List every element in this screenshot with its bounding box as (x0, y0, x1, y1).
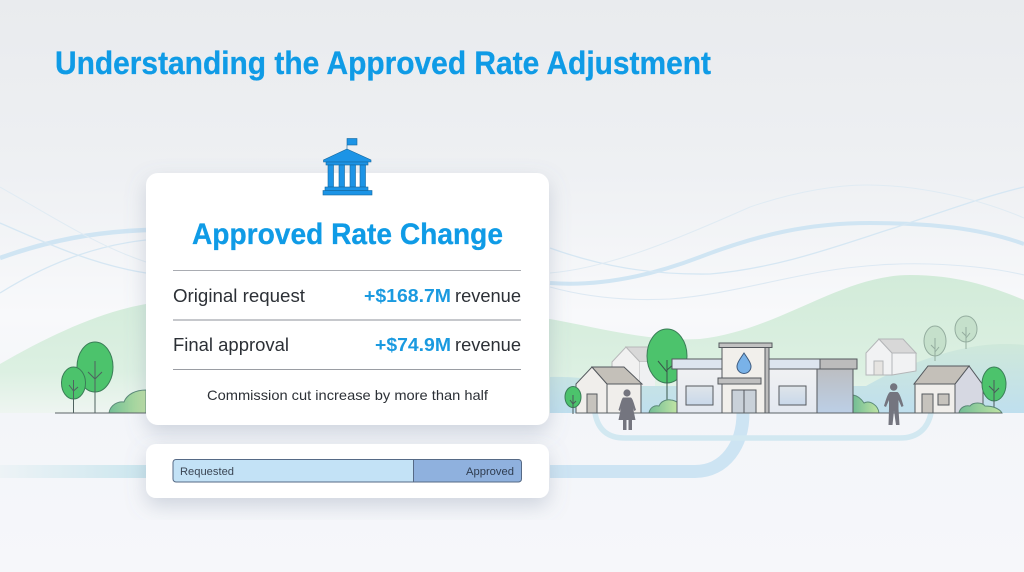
bush (649, 400, 677, 413)
row: final approval: revenue (455, 335, 521, 355)
water pipes (0, 413, 931, 478)
ground line (576, 412, 1002, 414)
icon: government building (323, 138, 372, 195)
row: original request: +$168.7M (364, 286, 451, 306)
row: final approval (173, 320, 521, 370)
title: Understanding the Approved Rate Adjustment (55, 45, 711, 81)
small tree (565, 386, 581, 414)
row: original request: Original request (173, 286, 305, 306)
right bush (959, 403, 1002, 413)
card heading: Approved Rate Change (192, 218, 503, 251)
comparison bar: Approved (466, 466, 514, 478)
left house (576, 367, 642, 413)
water drop (737, 353, 751, 374)
village scene (565, 316, 1006, 430)
row: final approval: Final approval (173, 335, 289, 355)
right tree (982, 367, 1006, 409)
row: final approval: +$74.9M (375, 335, 451, 355)
right house (914, 366, 983, 413)
hills (0, 275, 1024, 413)
back left house (612, 347, 655, 386)
comparison bar (173, 460, 522, 482)
faded trees (924, 316, 977, 361)
left trees (55, 342, 146, 413)
commission note: Commission cut increase by more than half (207, 387, 488, 403)
bush right of building (853, 395, 879, 413)
bar card (146, 444, 549, 498)
man figure (884, 383, 904, 425)
large tree (647, 329, 687, 400)
woman figure (618, 389, 636, 430)
back right house (866, 339, 916, 375)
row: original request: revenue (455, 286, 521, 306)
comparison bar: Requested (180, 466, 234, 478)
main card (146, 173, 549, 425)
background waves (0, 185, 1024, 300)
row: original request (173, 270, 521, 306)
water utility building (672, 343, 857, 413)
